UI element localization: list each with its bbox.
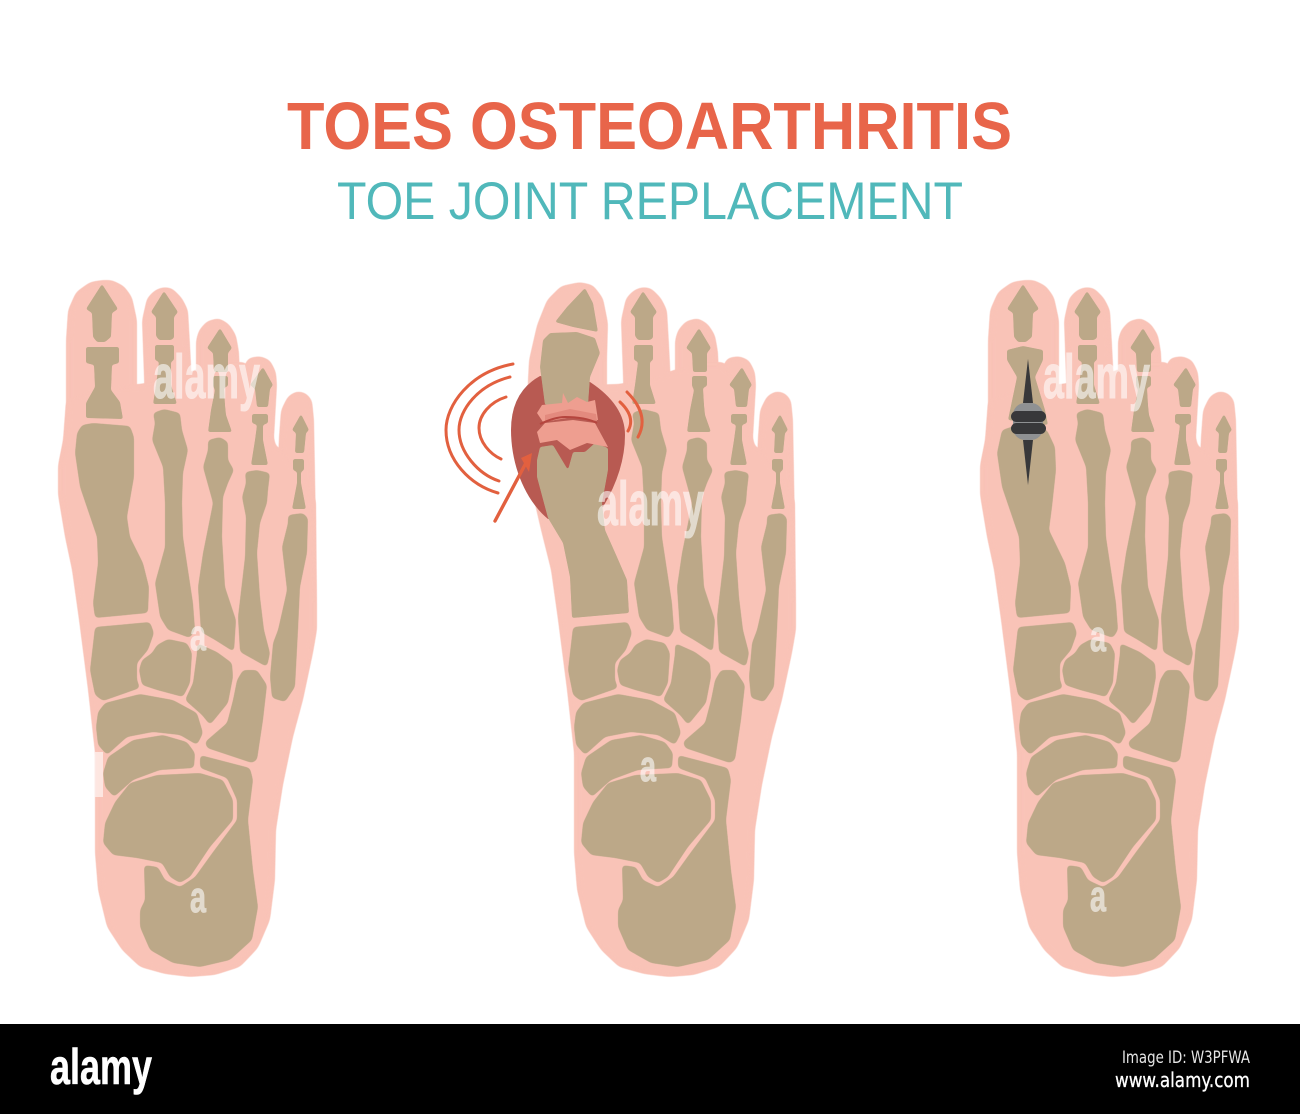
foot 2 tarsal bones xyxy=(568,622,745,967)
subtitle: TOE JOINT REPLACEMENT xyxy=(337,172,963,231)
cartilage darker band xyxy=(545,409,597,422)
foot 2 lesser bones xyxy=(630,291,788,702)
stock watermarks: alamy xyxy=(597,470,704,539)
stock watermarks: a xyxy=(1090,612,1106,661)
stock watermarks: a xyxy=(1090,872,1106,921)
website: www.alamy.com xyxy=(1115,1068,1250,1092)
foot 3 big toe bones xyxy=(997,284,1071,618)
foot 2: osteoarthritic foot xyxy=(446,282,796,977)
foot 1 skin xyxy=(58,280,317,977)
foot 3 skin xyxy=(980,280,1239,977)
stock watermarks: alamy xyxy=(153,343,260,412)
worn cartilage lower xyxy=(537,420,608,450)
stock watermarks: a xyxy=(190,611,206,660)
stock watermarks: a xyxy=(640,742,656,791)
stock watermarks: a xyxy=(190,873,206,922)
stock watermarks xyxy=(95,343,1150,922)
worn cartilage upper xyxy=(537,393,598,422)
pain arcs left xyxy=(446,364,513,493)
toe joint implant xyxy=(1011,359,1046,485)
foot 3: foot with joint implant xyxy=(980,280,1239,977)
joint crack xyxy=(540,417,597,424)
image id: Image ID: W3PFWA xyxy=(1122,1048,1250,1068)
foot 1 bones xyxy=(75,284,309,967)
title: TOES OSTEOARTHRITIS xyxy=(287,89,1012,164)
inflamed joint area xyxy=(511,376,625,519)
footer logo: alamy xyxy=(50,1039,152,1095)
pain arcs right xyxy=(620,392,642,437)
arrow pointing at joint xyxy=(495,453,532,521)
foot 3 lesser and tarsal bones xyxy=(1013,291,1232,967)
damaged big toe bones xyxy=(537,288,629,618)
foot 1: healthy foot skeleton xyxy=(58,280,317,977)
stock watermarks: alamy xyxy=(1043,343,1150,412)
foot 2 skin xyxy=(527,282,796,977)
footer bar xyxy=(0,1024,1300,1114)
